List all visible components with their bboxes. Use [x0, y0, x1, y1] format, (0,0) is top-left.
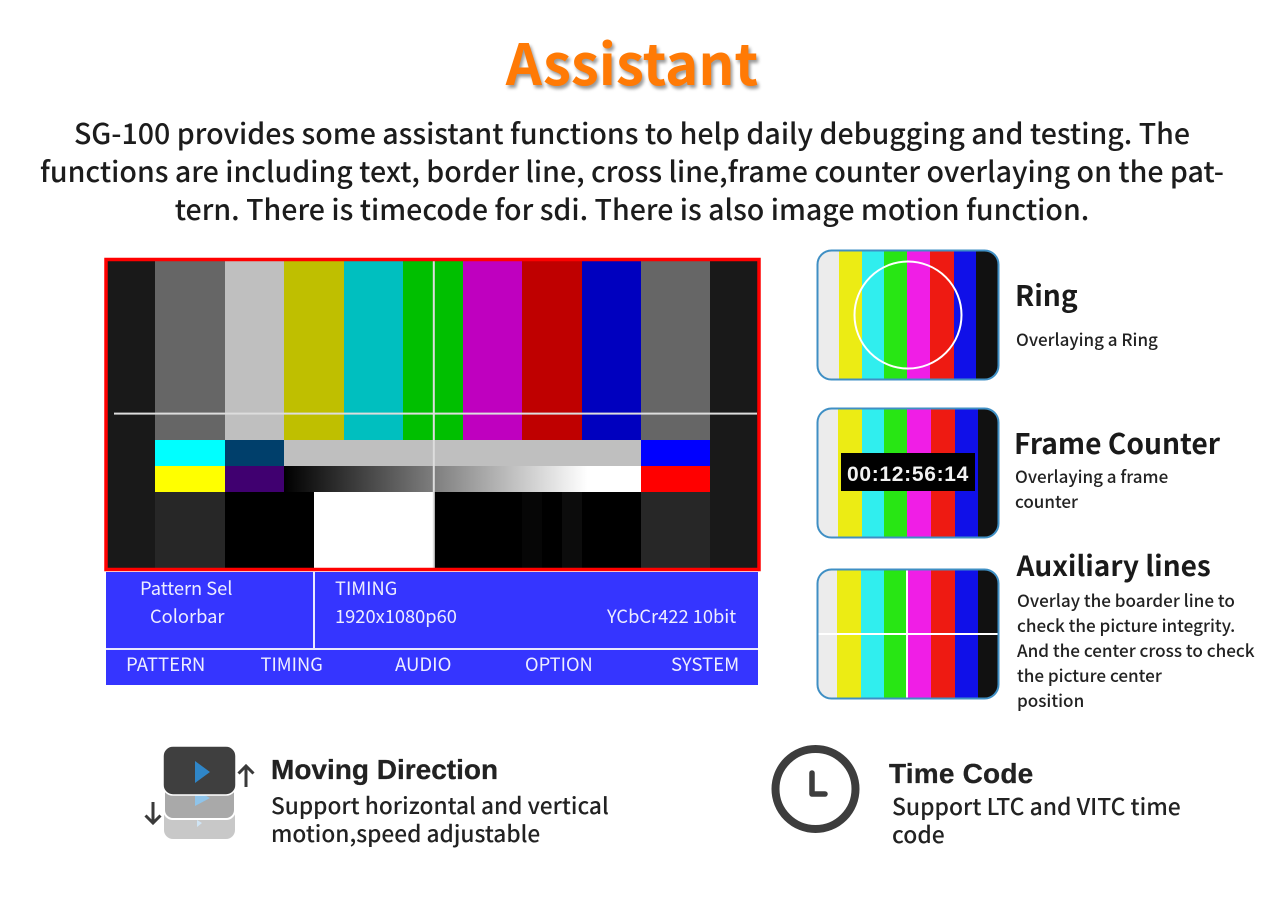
title: Assistant [506, 21, 758, 102]
intro text: SG-100 provides some assistant functions to help daily debugging and testing. The [74, 112, 1190, 153]
tab: timing: TIMING [260, 651, 323, 677]
caption: auxiliary lines: the picture center [1017, 662, 1162, 687]
thumbnail: frame counter: 00:12:56:14 [847, 463, 969, 486]
tab: system: SYSTEM [671, 650, 739, 677]
text: moving direction [271, 788, 609, 849]
heading: frame counter: Frame Counter [1014, 422, 1220, 463]
caption: ring: Overlaying a Ring [1016, 326, 1158, 351]
tab: pattern: PATTERN [126, 650, 205, 677]
tab: audio: AUDIO [395, 650, 451, 677]
label: colour format: YCbCr422 10bit [607, 603, 736, 629]
caption: auxiliary lines: check the picture integrity. [1017, 612, 1235, 637]
heading: auxiliary lines: Auxiliary lines [1016, 545, 1211, 585]
caption: frame counter: counter [1015, 488, 1078, 513]
panel: blue status menu [106, 572, 758, 685]
heading: moving direction: Moving Direction [271, 754, 498, 785]
intro text [40, 112, 1224, 229]
label: timing heading: TIMING [335, 575, 397, 601]
text: moving direction: Support horizontal and vertical [271, 788, 609, 821]
text: moving direction: motion,speed adjustable [271, 816, 540, 849]
text: time code [892, 788, 1181, 850]
intro text: functions are including text, border line, cross line,frame counter overlaying on the pat- [40, 150, 1224, 191]
caption: auxiliary lines: Overlay the boarder line to [1017, 587, 1235, 612]
heading: time code: Time Code [889, 758, 1033, 789]
thumbnail: frame counter [816, 408, 1000, 538]
label: pattern sel: Pattern Sel [140, 575, 233, 601]
tab: option: OPTION [525, 651, 593, 677]
label: resolution: 1920x1080p60 [335, 603, 457, 629]
heading: ring: Ring [1015, 274, 1078, 315]
caption: auxiliary lines [1017, 587, 1255, 712]
caption: frame counter: Overlaying a frame [1015, 463, 1168, 488]
caption: auxiliary lines: And the center cross to check [1017, 637, 1255, 662]
text: time code: Support LTC and VITC time [892, 788, 1181, 822]
intro text: tern. There is timecode for sdi. There is also image motion function. [175, 188, 1089, 229]
icon: moving direction [144, 746, 254, 839]
thumbnail: ring [816, 250, 1000, 380]
thumbnail: auxiliary lines [816, 568, 1000, 700]
text: time code: code [892, 816, 945, 850]
label: colorbar: Colorbar [150, 603, 224, 629]
caption: frame counter [1015, 463, 1168, 513]
icon: clock [772, 745, 860, 833]
caption: auxiliary lines: position [1017, 687, 1084, 712]
menu dividers [106, 572, 758, 650]
